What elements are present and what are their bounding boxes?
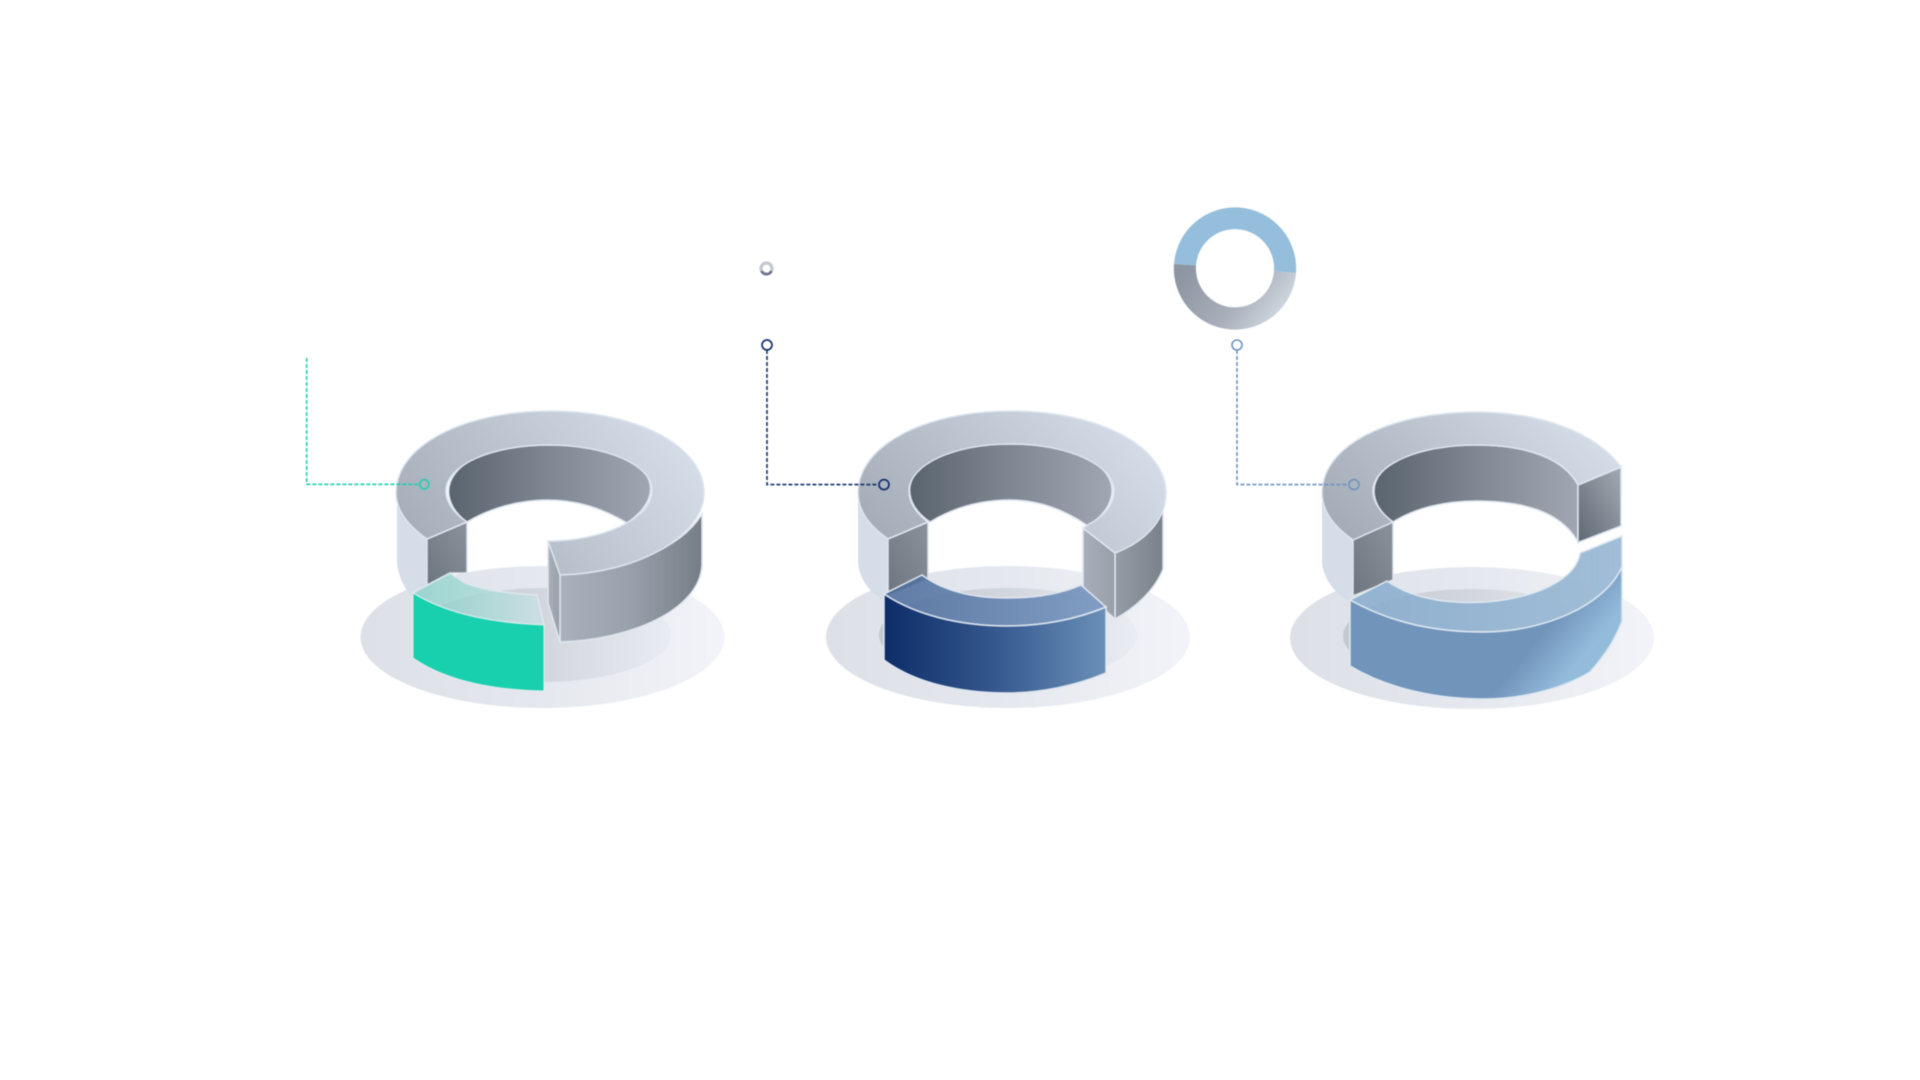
chart 3: light blue ring	[1232, 340, 1654, 709]
ground shadow 1	[360, 566, 724, 708]
teal segment	[413, 573, 544, 691]
chart 2: navy ring	[762, 340, 1190, 708]
light blue segment	[1350, 536, 1622, 699]
ring body 1	[396, 411, 704, 642]
callout line 1	[307, 358, 429, 489]
chart 1: teal ring	[307, 358, 724, 708]
large donut icon	[1174, 207, 1296, 330]
small donut icon	[761, 263, 772, 274]
ring body 2	[858, 411, 1166, 619]
ring body 3	[1322, 412, 1621, 602]
ground shadow 3	[1290, 567, 1654, 709]
navy segment	[884, 575, 1106, 693]
callout line 3	[1232, 340, 1359, 490]
callout line 2	[762, 340, 889, 490]
ground shadow 2	[826, 566, 1190, 708]
